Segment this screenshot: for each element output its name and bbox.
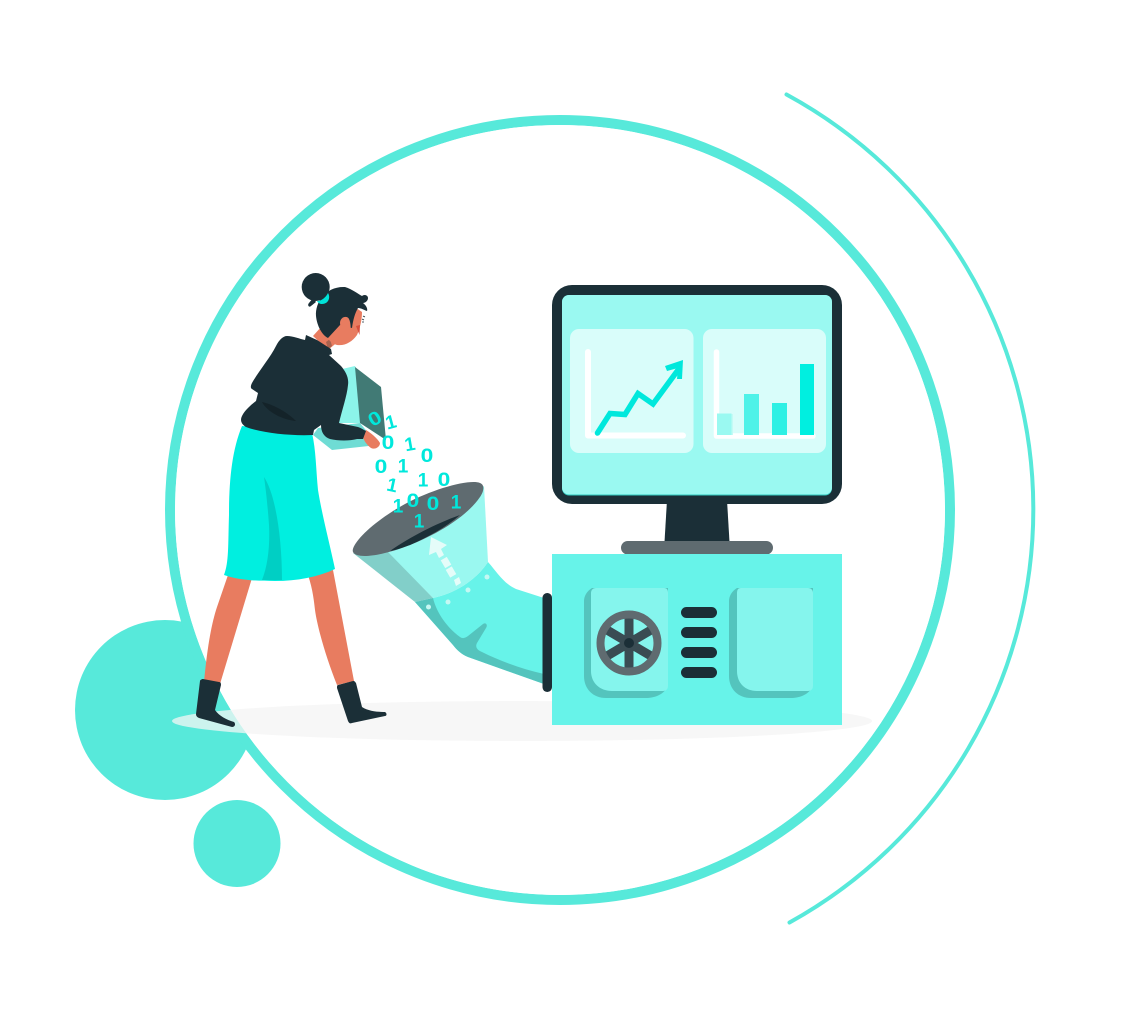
- falling binary digits: 1: [414, 512, 425, 532]
- small background blob: [194, 800, 280, 887]
- hair tie: [317, 293, 329, 304]
- falling binary digits: [364, 407, 462, 532]
- falling binary digits: 0: [382, 433, 394, 453]
- neck: [313, 326, 340, 350]
- monitor frame: [552, 285, 842, 504]
- falling binary digits: 0: [407, 491, 419, 511]
- monitor screen: [562, 295, 832, 494]
- monitor base: [621, 541, 773, 554]
- sweater: [241, 335, 366, 440]
- monitor screen edge: [562, 295, 832, 496]
- falling binary digits: 1: [451, 492, 462, 514]
- pipe collar: [542, 593, 552, 692]
- ring interior mask: [175, 125, 945, 895]
- woman: [196, 273, 386, 727]
- nose: [356, 325, 360, 335]
- box: [313, 366, 386, 450]
- falling binary digits: 1: [385, 475, 400, 497]
- right boot: [337, 681, 386, 723]
- ear: [340, 317, 351, 333]
- head: [302, 273, 368, 345]
- funnel pipe: [353, 482, 552, 692]
- ground shadow over blob: [172, 701, 872, 741]
- hair: [316, 287, 368, 338]
- upward arrow: [429, 537, 461, 586]
- funnel rim: [353, 482, 483, 556]
- large background blob: [75, 620, 255, 800]
- skirt: [224, 426, 335, 581]
- hand: [363, 430, 380, 449]
- right leg: [308, 570, 354, 685]
- falling binary digits: 0: [421, 446, 433, 466]
- skirt fold: [262, 477, 282, 580]
- pipe dots: [426, 574, 490, 610]
- falling binary digits: 1: [398, 456, 409, 478]
- bar chart panel: [703, 329, 826, 453]
- eyelash: [362, 316, 365, 322]
- ground shadow: [232, 711, 244, 730]
- big ring: [170, 120, 950, 900]
- left boot: [196, 679, 235, 727]
- falling binary digits: 1: [418, 470, 429, 492]
- monitor: [552, 285, 842, 554]
- left compartment: [584, 588, 668, 698]
- falling binary digits: 1: [383, 411, 399, 435]
- machine: [552, 554, 842, 725]
- falling binary digits: 0: [427, 494, 439, 514]
- machine body: [552, 554, 842, 725]
- fan: [600, 614, 658, 672]
- right compartment: [729, 588, 813, 698]
- face: [327, 305, 362, 345]
- funnel cone shade: [353, 551, 433, 602]
- illustration: [75, 92, 1036, 925]
- bun tail: [308, 298, 326, 307]
- indicator buttons: [681, 607, 717, 678]
- pipe shadow: [415, 598, 544, 684]
- monitor stand: [664, 500, 730, 542]
- outer arc: [786, 94, 1033, 922]
- bun: [302, 273, 330, 301]
- sweater crease: [262, 402, 296, 421]
- falling binary digits: 0: [438, 470, 450, 490]
- falling binary digits: 0: [375, 457, 387, 477]
- line chart panel: [570, 329, 694, 453]
- left leg: [204, 575, 252, 684]
- falling binary digits: 1: [393, 496, 404, 518]
- pipe body: [415, 562, 544, 684]
- funnel inner: [390, 515, 460, 551]
- funnel cone: [387, 486, 488, 598]
- falling binary digits: 1: [403, 434, 417, 456]
- falling binary digits: 0: [364, 407, 386, 431]
